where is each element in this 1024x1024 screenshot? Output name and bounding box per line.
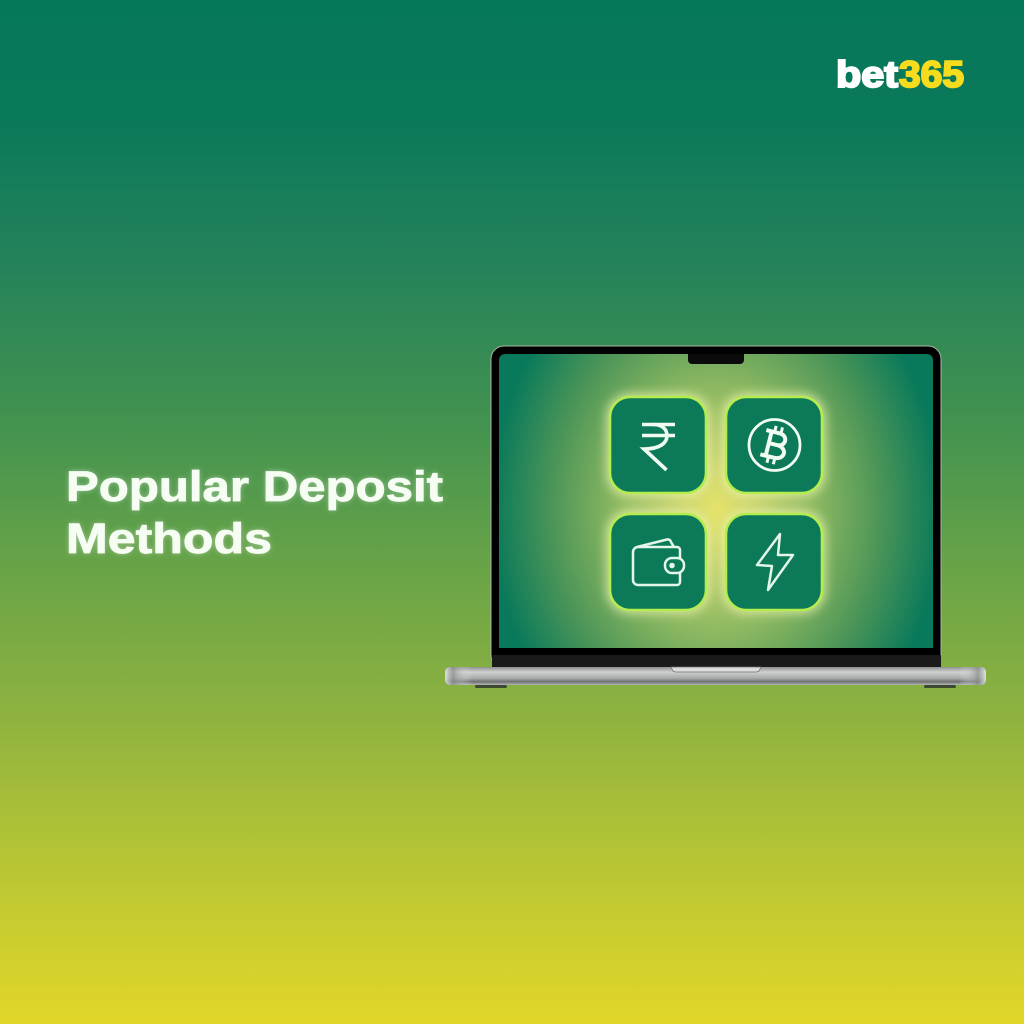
card glows bbox=[606, 393, 826, 614]
hinge notch bbox=[671, 667, 761, 672]
logo: bet365: bet bbox=[836, 54, 898, 95]
title: Popular Deposit bbox=[66, 463, 443, 511]
camera notch bbox=[688, 354, 744, 364]
icon: wallet bbox=[633, 539, 684, 585]
icon: lightning bolt bbox=[757, 534, 793, 590]
title: Popular Deposit bbox=[66, 463, 443, 511]
title: Methods bbox=[66, 515, 272, 563]
card: rupee bbox=[610, 397, 706, 493]
card: wallet bbox=[610, 514, 706, 610]
laptop screen bbox=[499, 354, 933, 648]
card: bitcoin bbox=[726, 397, 822, 493]
card: lightning bbox=[726, 514, 822, 610]
logo: bet365 bbox=[836, 54, 964, 95]
title bbox=[66, 463, 443, 563]
icon: rupee bbox=[642, 424, 675, 470]
bottom bezel bbox=[492, 655, 941, 668]
laptop bbox=[445, 346, 986, 688]
title: Methods bbox=[66, 515, 272, 563]
icon: bitcoin bbox=[749, 420, 800, 470]
logo: bet365: 365 bbox=[899, 54, 964, 95]
laptop feet bbox=[475, 685, 507, 688]
laptop base bbox=[445, 667, 986, 685]
laptop lid bbox=[491, 346, 941, 668]
